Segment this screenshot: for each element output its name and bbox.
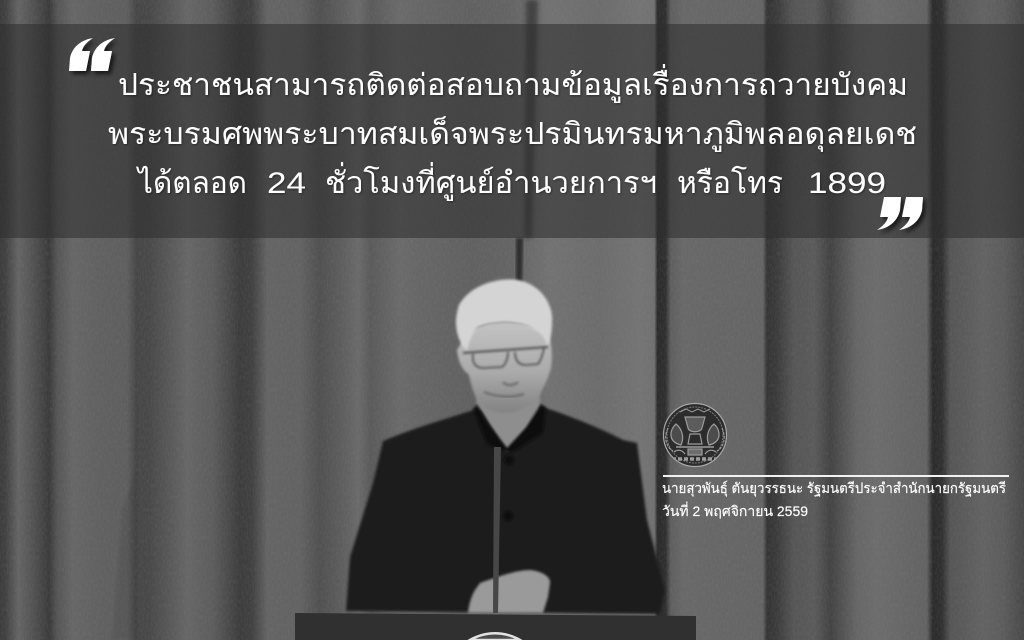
quote text: ชั่วโมงที่ศูนย์อำนวยการฯ [325, 162, 657, 201]
speaker hair [456, 279, 552, 351]
icon: government seal [664, 404, 726, 466]
speaker glasses [463, 347, 548, 368]
speaker neck [476, 390, 540, 452]
quote band [0, 24, 1024, 238]
caption: speaker and date: วันที่ 2 พฤศจิกายน 2559 [662, 502, 808, 519]
quote text: 1899 [808, 167, 886, 200]
icon: closing quote mark [877, 197, 923, 230]
quote text: ประชาชนสามารถติดต่อสอบถามข้อมูลเรื่องการถวายบังคม [118, 64, 908, 103]
quote text: หรือโทร [677, 165, 783, 200]
quote text [108, 64, 917, 201]
speaker ear and face [457, 322, 552, 413]
microphone stand [493, 447, 501, 613]
divider line [663, 475, 1009, 477]
speaker collar [473, 404, 546, 452]
caption: speaker and date: นายสุวพันธุ์ ตันยุวรรธนะ รัฐมนตรีประจำสำนักนายกรัฐมนตรี [662, 480, 1006, 497]
speaker hands [468, 570, 550, 613]
quote text: 24 [267, 167, 306, 200]
speaker jacket [346, 407, 665, 614]
quote text: พระบรมศพพระบาทสมเด็จพระปรมินทรมหาภูมิพลอดุลยเดช [108, 115, 917, 153]
speaker nose and mouth [484, 382, 524, 396]
jacket buttons [503, 455, 514, 521]
quote text: ได้ตลอด [136, 165, 247, 200]
icon: opening quote mark [69, 38, 115, 71]
podium [295, 613, 696, 640]
photo: speaker at podium [295, 279, 696, 640]
podium seal [470, 633, 520, 640]
caption: speaker and date [662, 480, 1006, 519]
